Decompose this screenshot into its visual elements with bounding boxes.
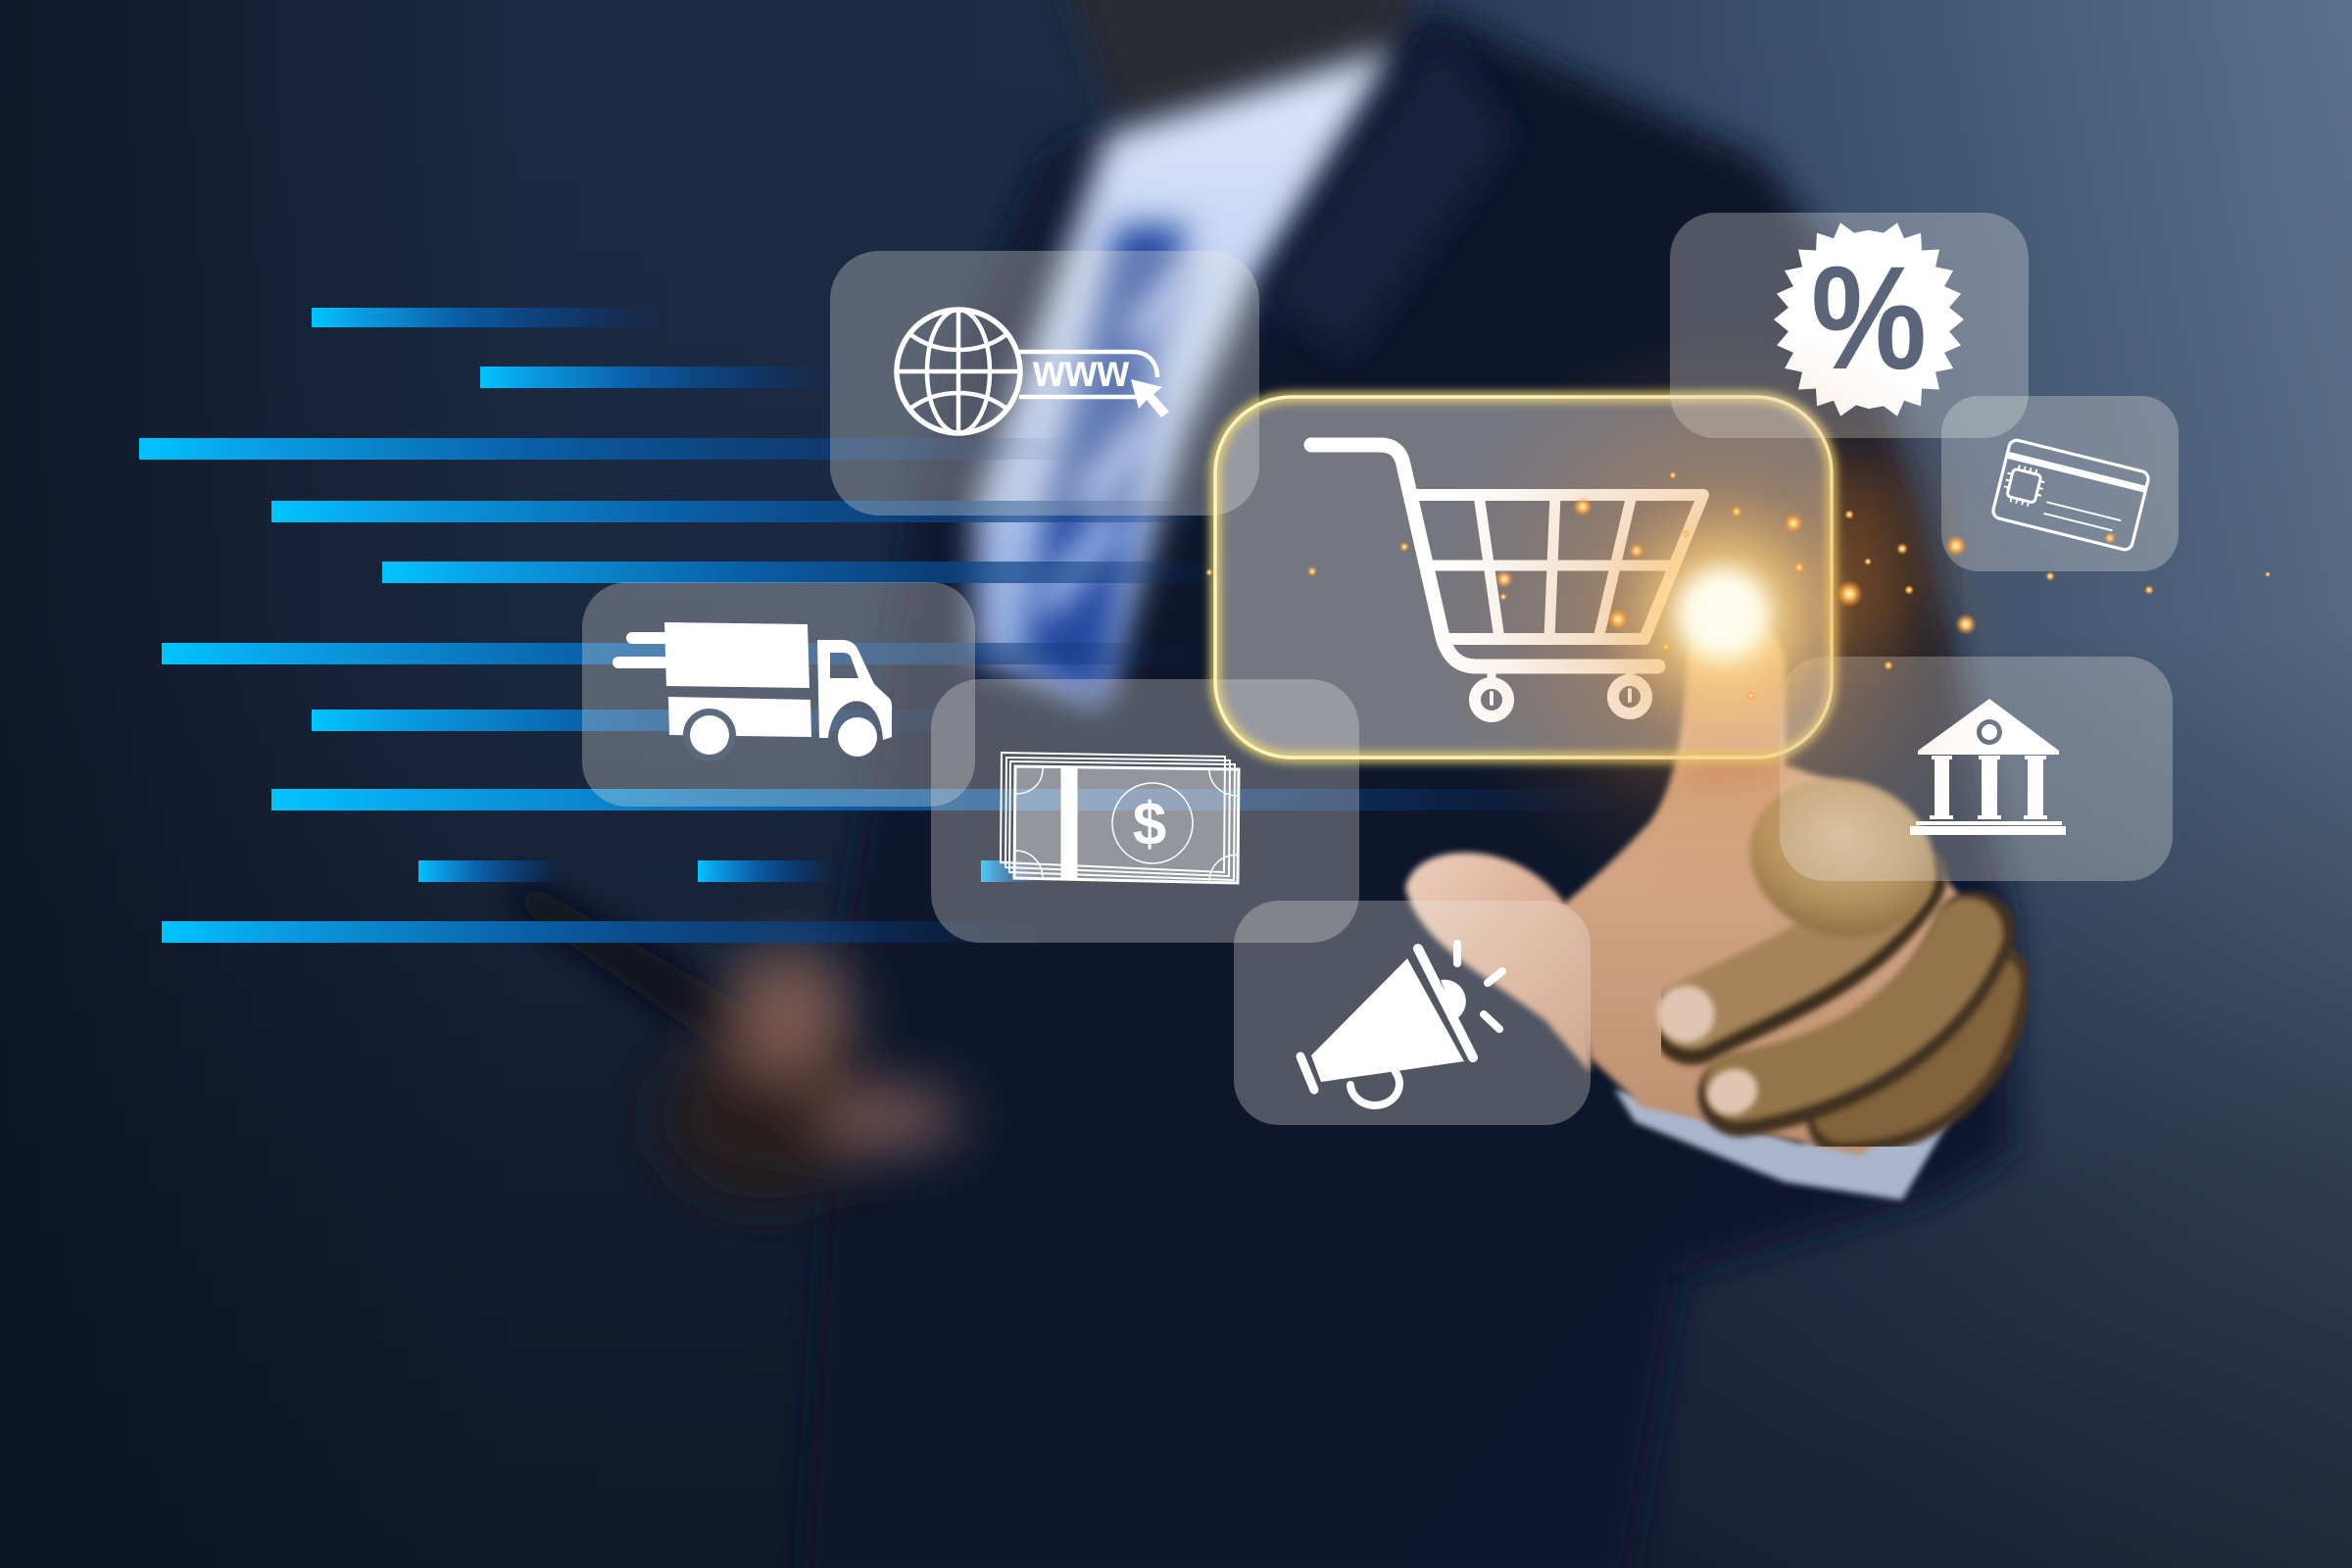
icon: shopping cart (1311, 445, 1703, 716)
holding hand (660, 929, 960, 1200)
tie stripes (1043, 277, 1193, 608)
shirt cuff (1614, 1089, 1957, 1200)
panel: discount (1670, 213, 2029, 438)
blurred businessman in suit (503, 0, 2018, 1568)
icon: banknote stack (1001, 753, 1239, 883)
panel: cash (931, 679, 1359, 943)
thumb (1405, 853, 1591, 1072)
panel: marketing (1234, 901, 1591, 1125)
fingernails (1648, 976, 1765, 1123)
panel: shopping cart (1215, 397, 1832, 758)
neck and chin (1065, 0, 1425, 120)
icon: globe with www address bar: www (1032, 345, 1129, 396)
panel: credit card (1941, 396, 2179, 571)
jacket lapel (1260, 30, 1515, 360)
tie (1023, 225, 1188, 705)
curled fingers (1692, 877, 1998, 1122)
icon: megaphone (1300, 944, 1502, 1105)
icon: bank building (1910, 699, 2066, 835)
icon: banknote stack: $ (1133, 791, 1166, 858)
warm haze behind sparks (1815, 458, 1920, 653)
icon: truck (618, 622, 892, 761)
icon: percent starburst (1774, 222, 1964, 416)
light glow at fingertip (1431, 321, 2019, 909)
fingernail shadow (1688, 735, 1782, 788)
icon: credit card with chip (1991, 439, 2150, 551)
hand palm and pointing finger (1560, 616, 2018, 1155)
panel: delivery truck (582, 582, 975, 807)
icon: globe with www address bar (897, 310, 1169, 433)
shirt (975, 48, 1395, 705)
sparks (1205, 471, 2271, 701)
panel: website (830, 251, 1259, 515)
highlighted border (1215, 397, 1832, 758)
fingertip flare (1682, 572, 1764, 655)
panel: bank (1780, 657, 2173, 881)
phone (503, 885, 862, 1125)
blue speed bars (139, 308, 1624, 943)
main knuckle (1732, 759, 1952, 957)
icon: percent starburst: % (1811, 235, 1927, 400)
